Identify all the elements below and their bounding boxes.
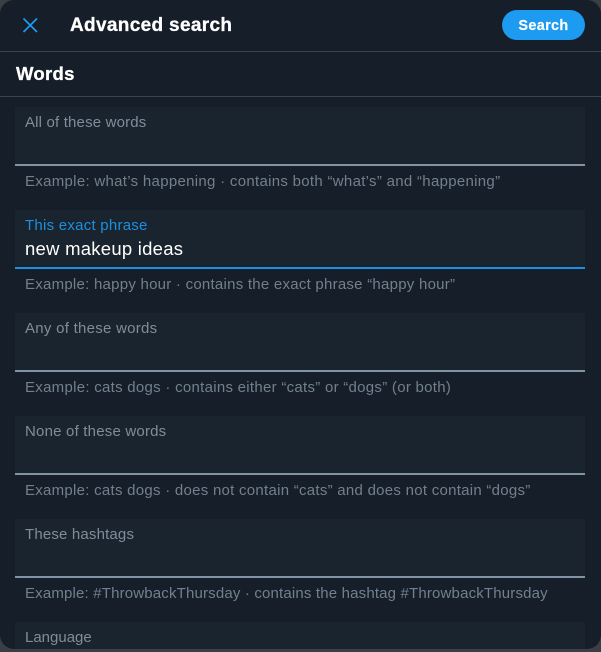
button: search (502, 10, 585, 40)
icon: close X (23, 18, 38, 33)
field: all of these words (15, 107, 585, 166)
field: language: Language (25, 629, 92, 646)
hint: all of these words: Example: what’s happening · contains both “what’s” and “happening” (25, 173, 500, 190)
hint: any of these words: Example: cats dogs · contains either “cats” or “dogs” (or both) (25, 379, 451, 396)
heading: words: Words (16, 63, 75, 84)
button: search: Search (518, 18, 569, 34)
field: this exact phrase: new makeup ideas (25, 238, 183, 259)
field: any of these words (15, 313, 585, 372)
field: none of these words: None of these words (25, 423, 166, 440)
hint: none of these words: Example: cats dogs · does not contain “cats” and does not contain “dogs” (25, 482, 531, 499)
field: any of these words: Any of these words (25, 320, 157, 337)
field: these hashtags (15, 519, 585, 578)
field: none of these words (15, 416, 585, 475)
hint: these hashtags: Example: #ThrowbackThursday · contains the hashtag #ThrowbackThursday (25, 585, 548, 602)
field: these hashtags: These hashtags (25, 526, 134, 543)
field: this exact phrase (15, 210, 585, 269)
field: this exact phrase: This exact phrase (25, 217, 148, 234)
field: all of these words: All of these words (25, 114, 146, 131)
hint: this exact phrase: Example: happy hour · contains the exact phrase “happy hour” (25, 276, 455, 293)
field: language (15, 622, 585, 652)
title: Advanced search (70, 15, 232, 36)
